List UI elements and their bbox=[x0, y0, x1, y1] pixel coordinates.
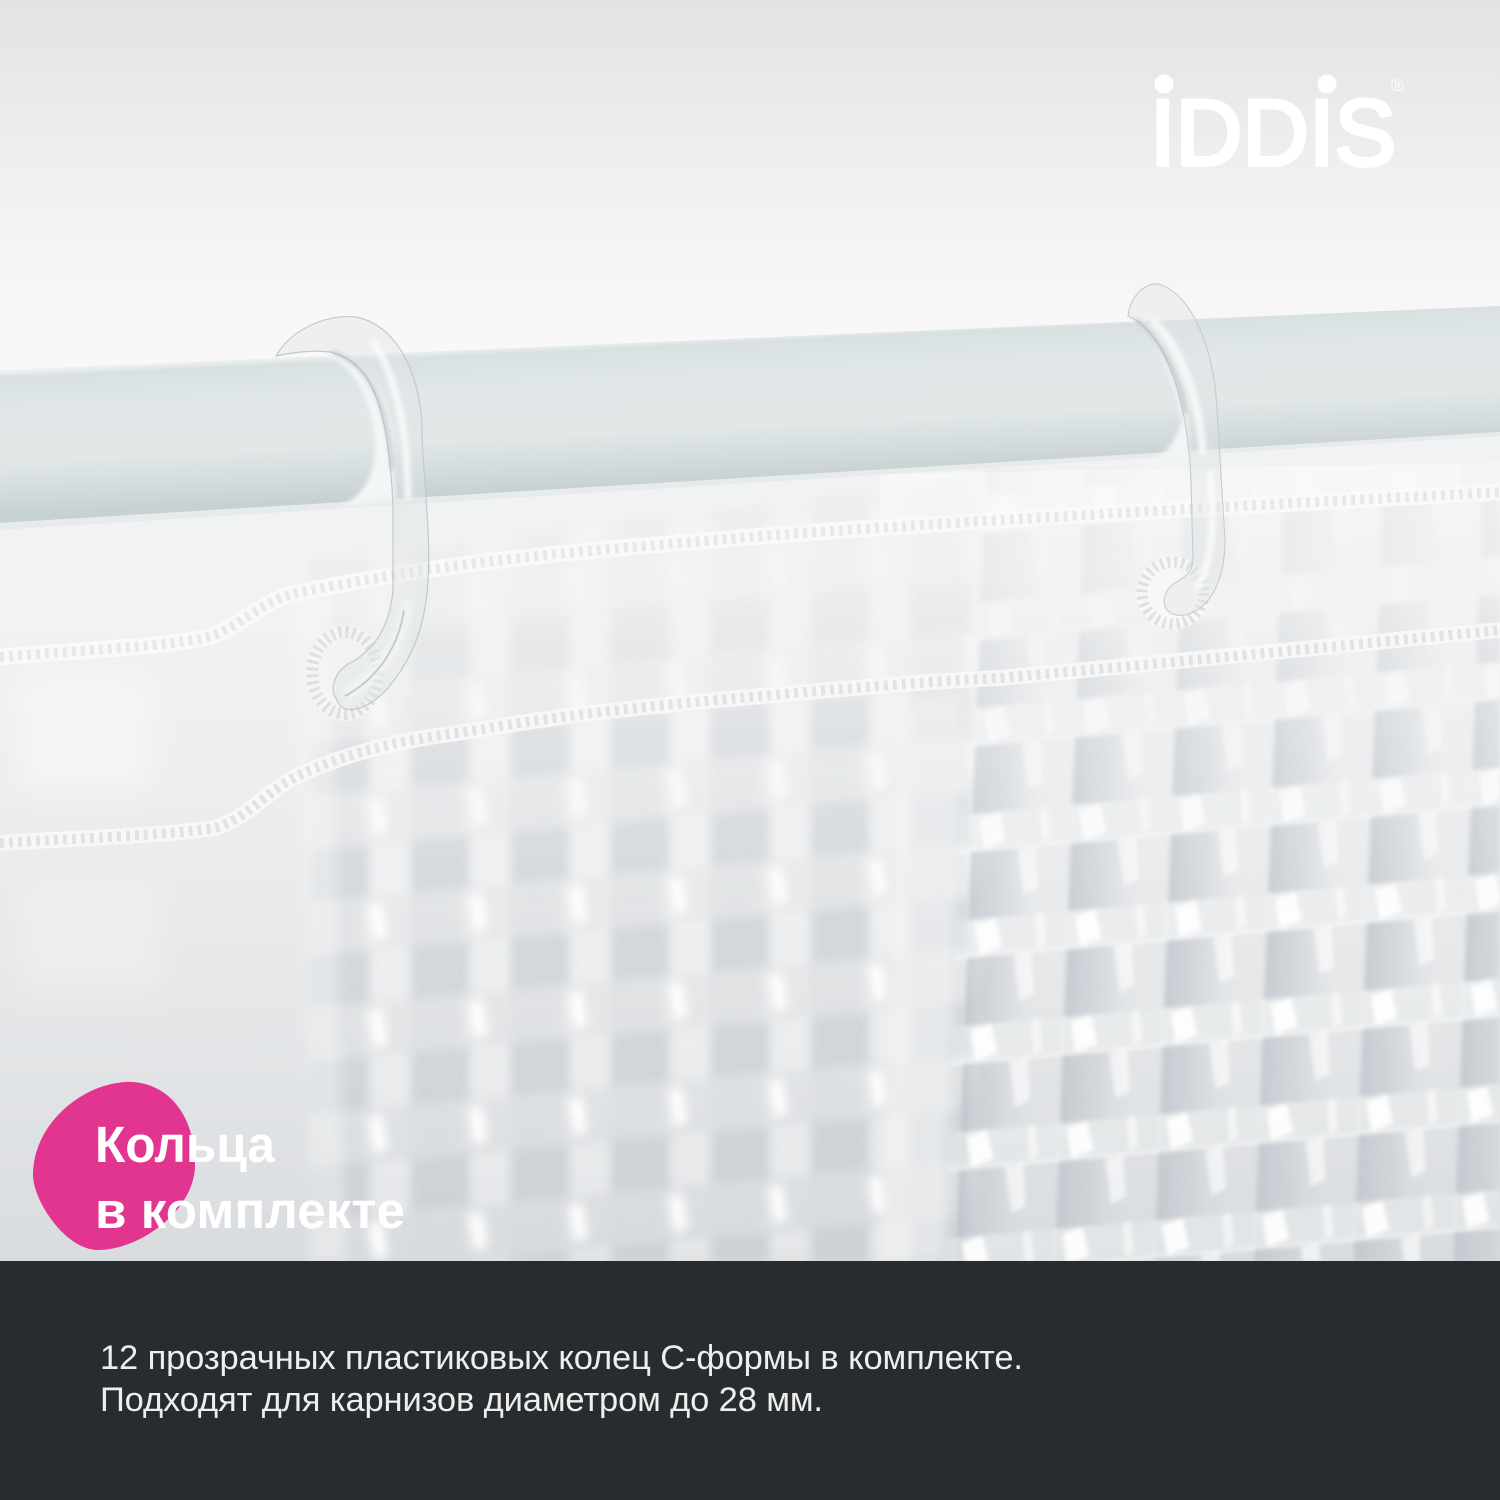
icon: left curtain ring bbox=[276, 317, 429, 710]
dark footer band bbox=[0, 1261, 1500, 1500]
description text: 12 прозрачных пластиковых колец С-формы в комплекте. bbox=[100, 1339, 1023, 1377]
heading bbox=[95, 1116, 405, 1239]
curtain rod bbox=[0, 306, 1500, 523]
curtain hem cord lower bbox=[0, 630, 1500, 843]
grommet left bbox=[305, 625, 385, 721]
icon: right curtain ring bbox=[1128, 284, 1225, 615]
rod shadow on wall bbox=[0, 432, 1500, 530]
heading: в комплекте bbox=[95, 1182, 405, 1239]
description text bbox=[100, 1339, 1023, 1419]
grommet right bbox=[1136, 556, 1210, 630]
logo: IDDIS: IDDIS bbox=[1150, 80, 1396, 185]
wall below the rod bbox=[0, 430, 1500, 690]
pink blob bbox=[33, 1082, 195, 1250]
description text: Подходят для карнизов диаметром до 28 мм. bbox=[100, 1381, 823, 1419]
heading: Кольца bbox=[95, 1116, 276, 1173]
panel: curtain bbox=[0, 588, 1500, 1261]
logo: IDDIS: ® bbox=[1391, 76, 1404, 95]
wall background bbox=[0, 0, 1500, 430]
curtain hem cord upper bbox=[0, 492, 1500, 657]
